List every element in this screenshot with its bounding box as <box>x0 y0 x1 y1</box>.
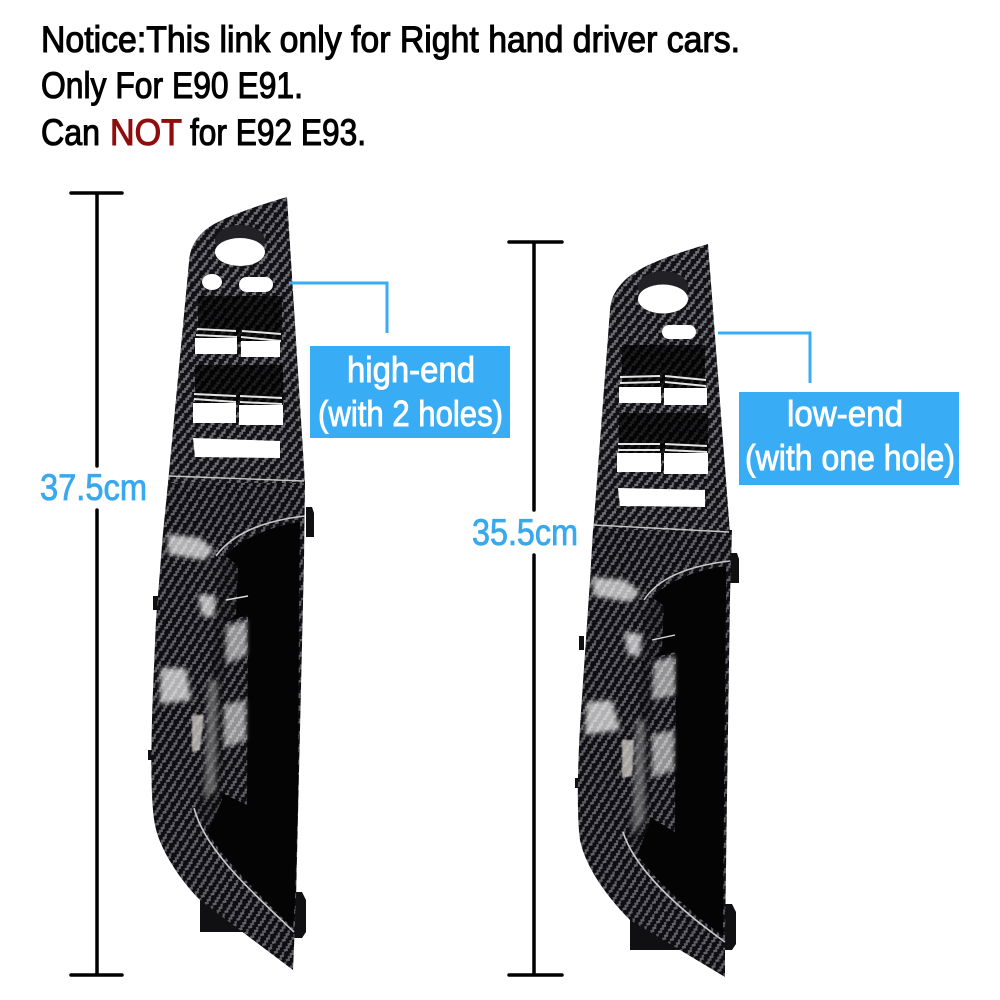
bottom slot <box>193 438 280 458</box>
window divider <box>652 635 675 640</box>
notice line 3 <box>41 112 366 153</box>
small round hole <box>202 274 222 290</box>
handle highlight strip <box>224 620 247 748</box>
left door panel: high-end <box>148 197 314 970</box>
handle window <box>222 615 248 805</box>
pill hole <box>239 277 273 292</box>
notice line 3: NOT <box>110 112 182 153</box>
left dimension bracket <box>71 193 122 975</box>
mounting tabs <box>148 507 314 938</box>
high-end callout <box>310 346 510 438</box>
notice heading <box>41 19 740 153</box>
dark hollow of the pull handle <box>195 522 300 928</box>
rim gloss <box>632 720 645 835</box>
handle window <box>650 652 676 832</box>
with 2 holes label: (with 2 holes) <box>318 393 503 434</box>
notice line 3: for E92 E93. <box>190 112 366 153</box>
seam line <box>169 476 304 481</box>
high-end leader line <box>289 283 387 333</box>
upper switch opening <box>619 345 707 405</box>
handle rim line <box>623 561 730 942</box>
pill hole <box>662 325 696 339</box>
upper carbon plate <box>168 197 305 483</box>
upper carbon plate <box>593 244 730 533</box>
notice line 1: Notice:This link only for Right hand driver cars. <box>41 19 740 60</box>
right dimension label: 35.5cm <box>472 512 578 553</box>
inner rim of handle <box>195 556 238 836</box>
notice line 2: Only For E90 E91. <box>41 65 303 106</box>
window divider <box>226 596 248 600</box>
low-end callout <box>739 392 959 485</box>
lower switch opening <box>617 413 708 474</box>
scuffed speckles <box>622 740 634 778</box>
low-end label: low-end <box>787 393 903 434</box>
dark hollow of the pull handle <box>625 566 726 936</box>
rim gloss <box>204 680 218 800</box>
handle rim line <box>194 516 305 932</box>
mounting tabs <box>575 553 739 950</box>
glossy highlights <box>585 577 642 735</box>
large round hole <box>638 271 688 314</box>
high-end label: high-end <box>347 349 475 390</box>
right dimension bracket <box>509 242 562 975</box>
left dimension label: 37.5cm <box>40 467 147 508</box>
lower carbon body <box>151 483 305 970</box>
scuffed speckles <box>192 715 204 752</box>
large round hole <box>215 225 265 266</box>
lower switch opening <box>193 365 283 425</box>
handle highlight strip <box>652 656 675 778</box>
bottom slot <box>618 488 705 507</box>
right door panel: low-end <box>575 244 739 977</box>
with one hole label: (with one hole) <box>745 437 955 478</box>
seam line <box>594 525 729 532</box>
low-end leader line <box>718 333 810 383</box>
notice line 3: Can <box>41 112 100 153</box>
upper switch opening <box>195 296 282 357</box>
glossy highlights <box>160 534 216 704</box>
inner rim of handle <box>625 598 664 858</box>
lower carbon body <box>578 530 732 977</box>
